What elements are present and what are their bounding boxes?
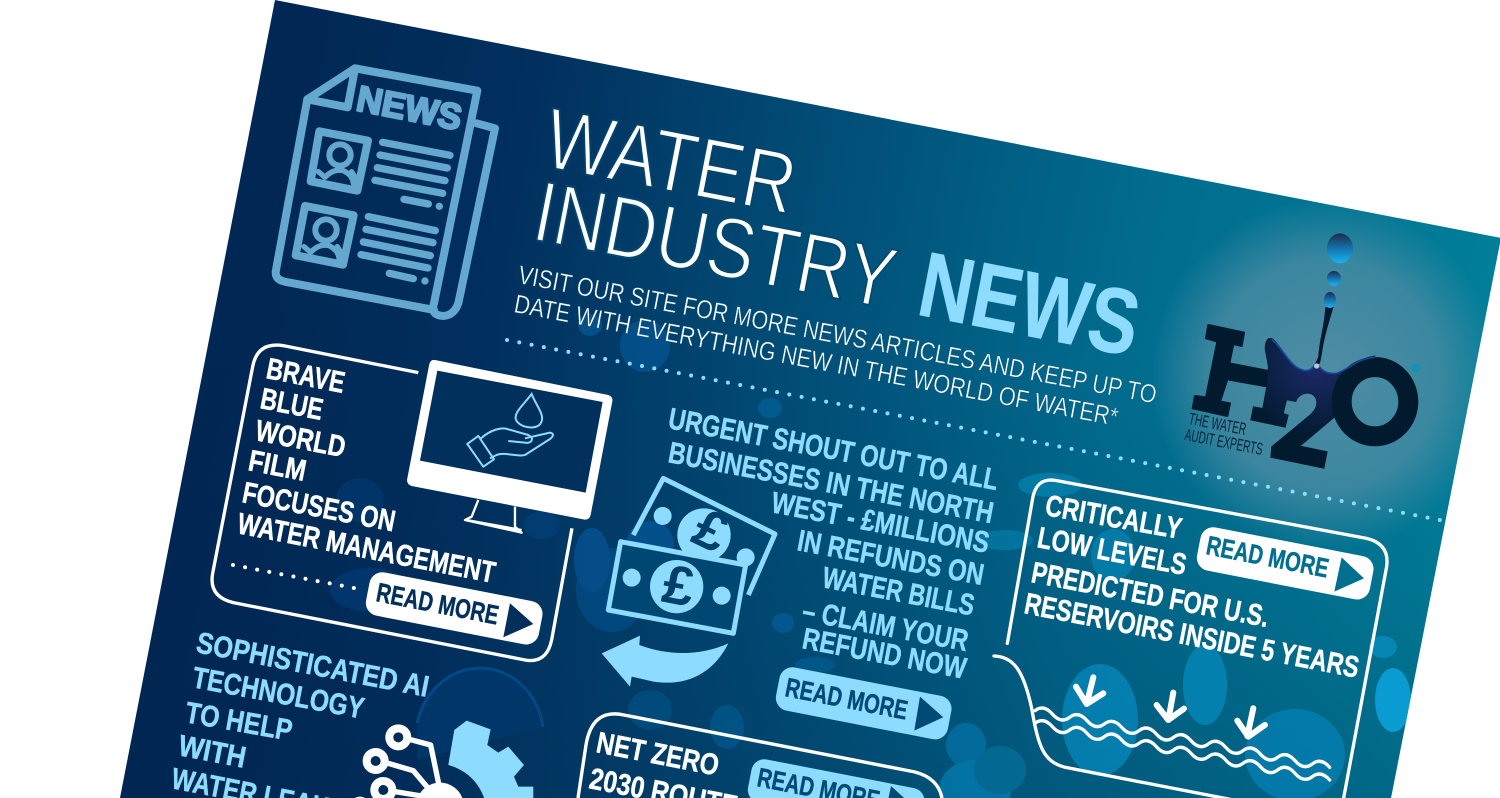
text: with: WITH: [176, 729, 249, 775]
text: claim your: – CLAIM YOUR: [800, 594, 971, 658]
panel: AI technology: [169, 626, 533, 798]
logo: liquid highlight: [1272, 339, 1375, 374]
text: to help: TO HELP: [183, 696, 295, 748]
logo: large drop: [1327, 233, 1353, 263]
panel: net zero: [578, 714, 942, 798]
text: refund now: REFUND NOW: [800, 622, 969, 686]
icon: money and arrow: £: [684, 496, 739, 565]
logo: water stem: [1314, 305, 1334, 367]
text: focuses on: FOCUSES ON: [240, 476, 398, 538]
subtitle line one: VISIT OUR SITE FOR MORE NEWS ARTICLES AND KEEP UP TO: [516, 259, 1159, 409]
text: critically: CRITICALLY: [1043, 489, 1184, 546]
card border: [212, 345, 572, 661]
text: predicted: PREDICTED FOR U.S.: [1029, 556, 1272, 634]
icon: money and arrow: [602, 478, 775, 687]
text: net zero: NET ZERO: [594, 726, 722, 783]
logo: liquid and numeral 2: [1251, 338, 1375, 468]
text: low levels: LOW LEVELS: [1035, 521, 1189, 582]
title: industry: INDUSTRY: [526, 163, 904, 327]
icon: newspaper: [276, 68, 495, 316]
logo: letter O: [1342, 367, 1408, 436]
button: read more: READ MORE: [783, 672, 910, 726]
icon: monitor with water and hand: [407, 360, 612, 533]
logo: small drop: [1324, 292, 1336, 308]
icon: newspaper masthead word: NEWS: [353, 78, 465, 138]
button: read more: READ MORE: [374, 577, 501, 631]
reservoir outline: [994, 656, 1233, 798]
background water drops: [330, 314, 1411, 798]
card border: [578, 714, 942, 798]
logo: registered mark: [1412, 364, 1420, 372]
logo: highlight: [1314, 363, 1319, 369]
text: sophisticated: SOPHISTICATED AI: [194, 626, 432, 704]
text: west millions: WEST - £MILLIONS: [769, 486, 992, 560]
subtitle line two: DATE WITH EVERYTHING NEW IN THE WORLD OF WATER*: [512, 288, 1121, 432]
text: reservoirs: RESERVOIRS INSIDE 5 YEARS: [1022, 587, 1362, 685]
logo strapline two: AUDIT EXPERTS: [1183, 425, 1264, 459]
text: blue: BLUE: [258, 382, 326, 427]
dotted divider: [507, 340, 1440, 520]
logo strapline one: THE WATER: [1187, 409, 1248, 439]
text: in refunds: IN REFUNDS ON: [795, 524, 987, 592]
card border: [1007, 480, 1387, 798]
text: world: WORLD: [253, 414, 348, 464]
text: film: FILM: [246, 444, 309, 488]
panel: refunds: [602, 402, 1001, 742]
text: businesses: BUSINESSES IN THE NORTH: [666, 436, 996, 530]
logo: H2O: [1193, 233, 1420, 468]
title: water: WATER: [537, 90, 804, 233]
logo: letter H: [1193, 325, 1272, 416]
logo: medium drop: [1327, 271, 1341, 286]
text: brave: BRAVE: [264, 352, 348, 400]
dotted rule: [233, 565, 354, 588]
icon: falling water level: [1035, 677, 1330, 780]
panel: critically low levels: [994, 480, 1387, 798]
icon: gear and circuit: [350, 721, 533, 798]
button: read more: READ MORE: [1204, 530, 1331, 584]
icon: money and arrow: £: [658, 552, 700, 619]
panel: brave blue world: [212, 345, 612, 661]
text: water management: WATER MANAGEMENT: [235, 507, 498, 590]
title: news: NEWS: [911, 234, 1148, 376]
text: water bills: WATER BILLS: [820, 561, 977, 622]
text: technology: TECHNOLOGY: [190, 661, 367, 726]
text: urgent shout out: URGENT SHOUT OUT TO ALL: [666, 402, 1001, 497]
